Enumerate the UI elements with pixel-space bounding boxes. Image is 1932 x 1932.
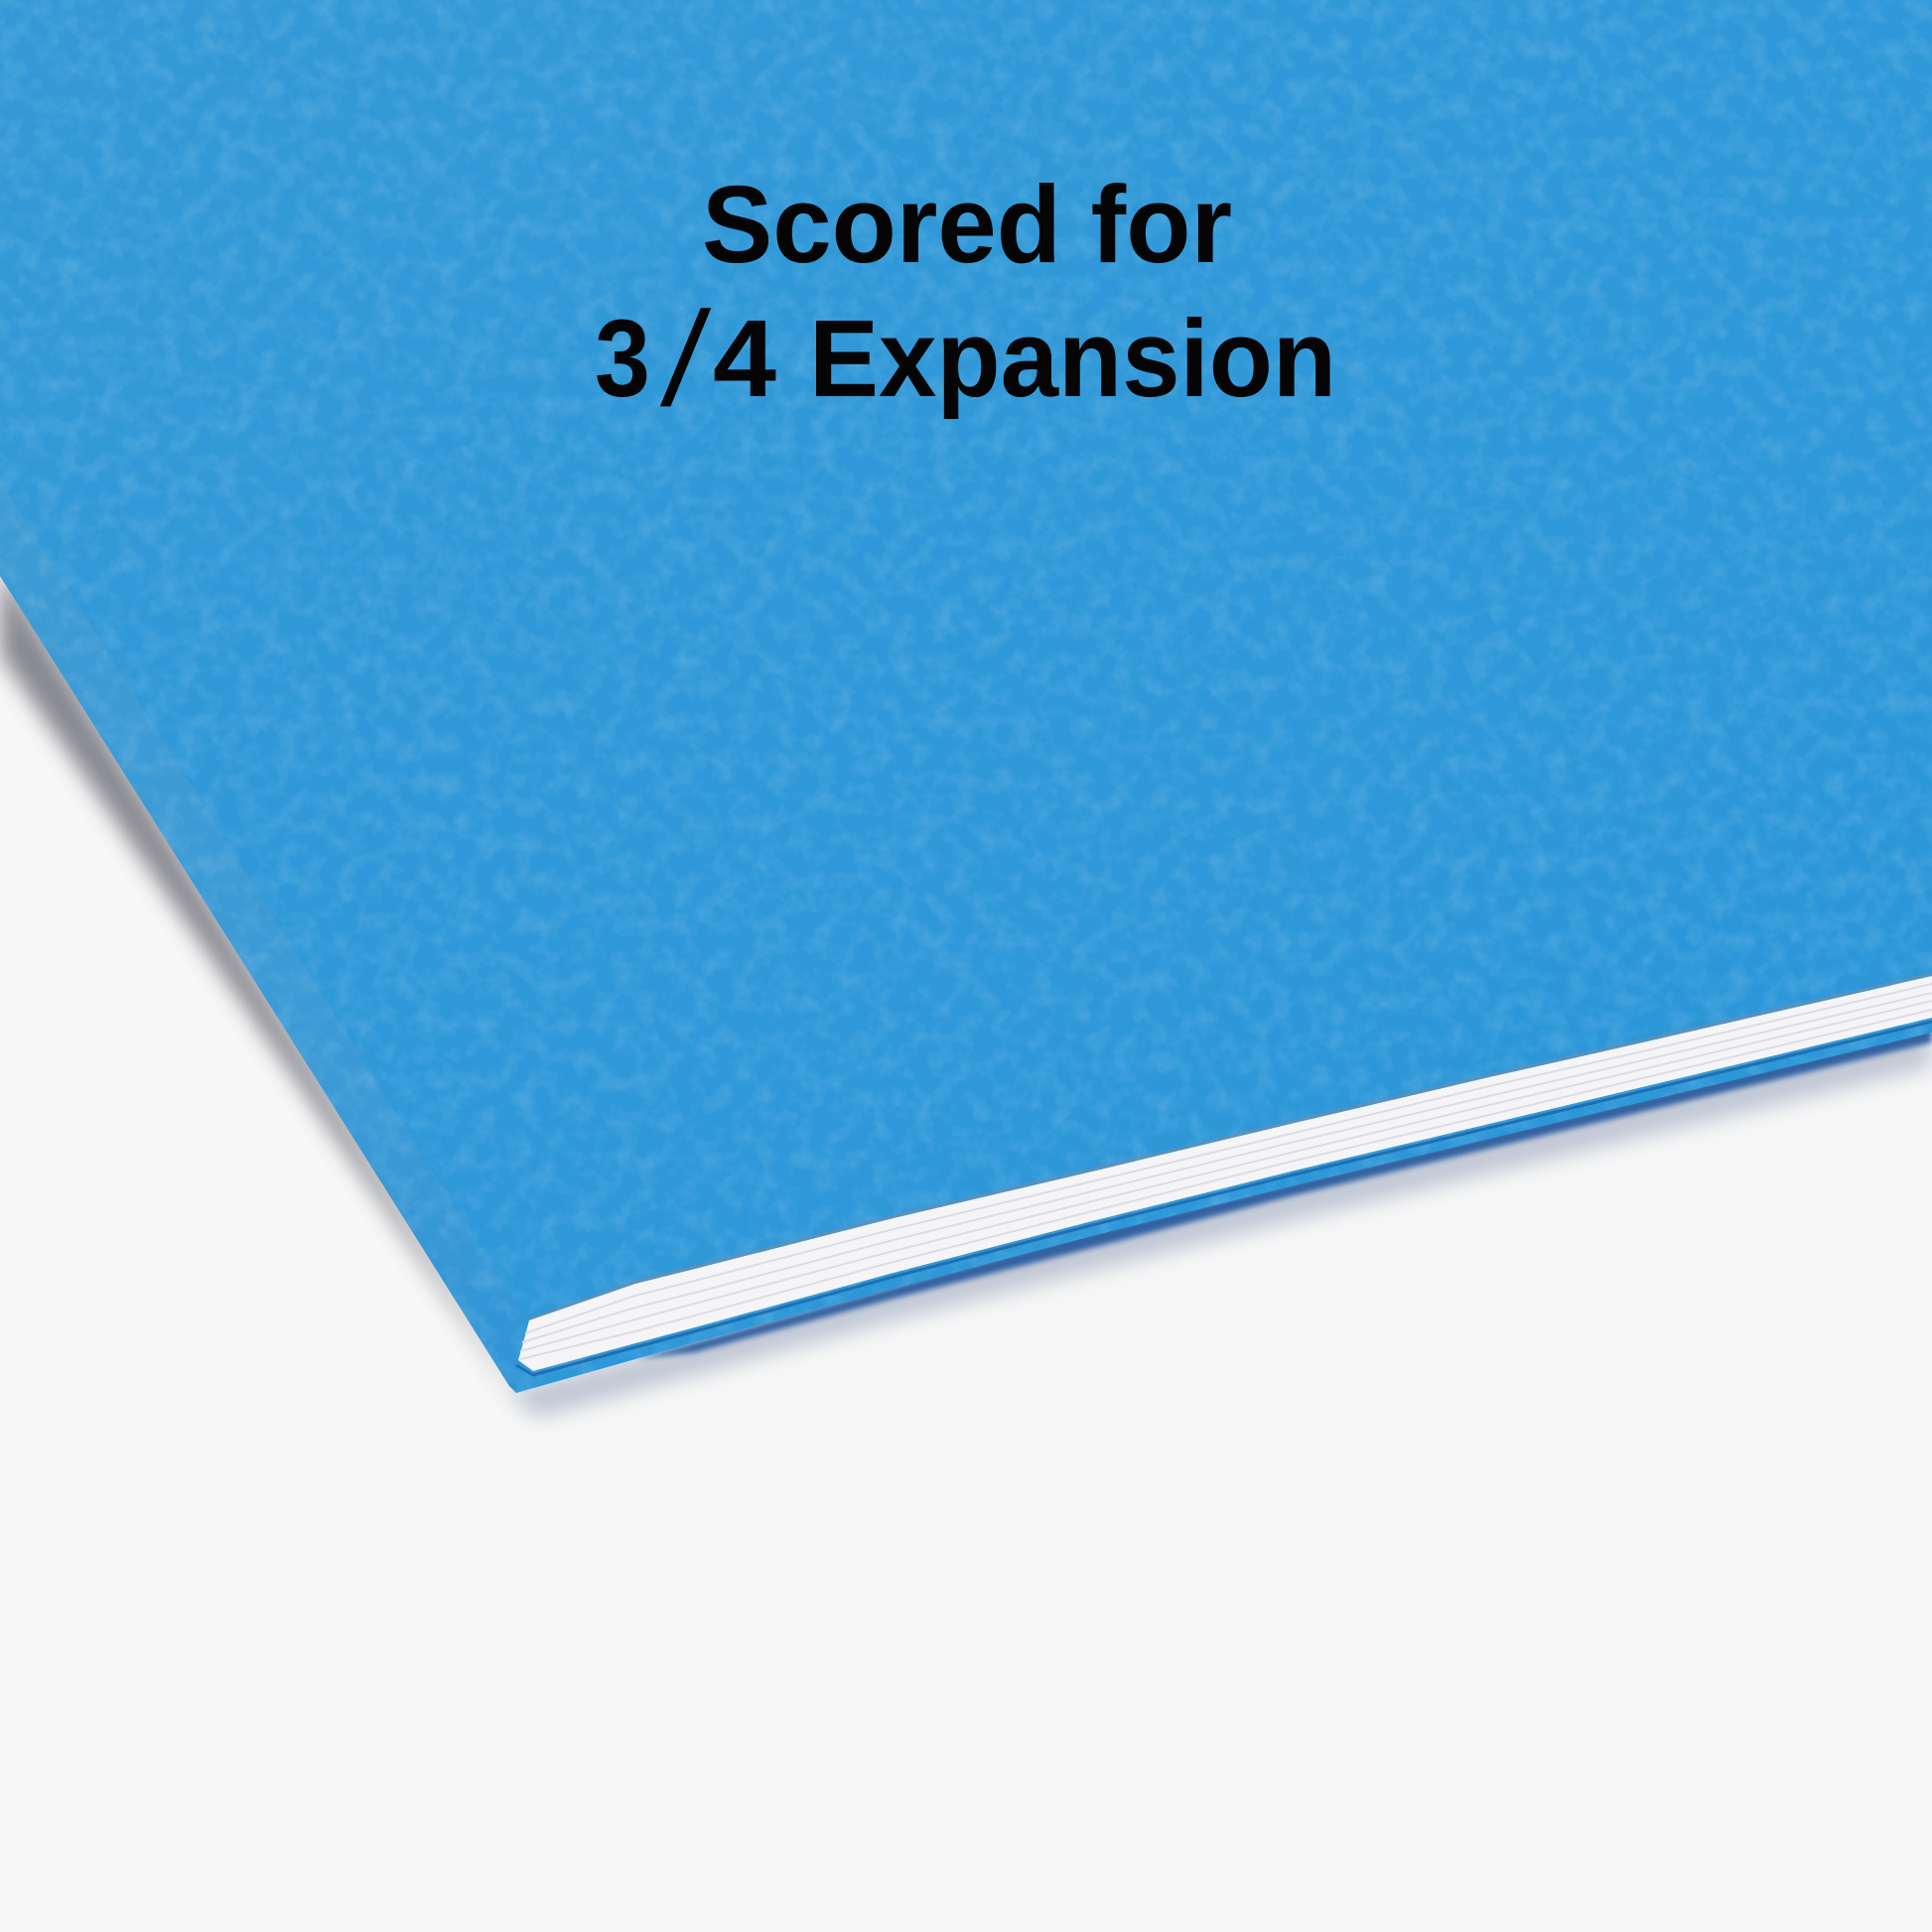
headline line 2: / bbox=[656, 284, 715, 434]
paper texture bbox=[0, 0, 1932, 1489]
product photo scene bbox=[0, 0, 1932, 1426]
headline line 1: Scored for bbox=[702, 164, 1232, 286]
headline line 2: 4 bbox=[713, 298, 776, 420]
headline line 2 bbox=[595, 284, 1336, 434]
sheet edges bbox=[520, 984, 1932, 1359]
folder cover bbox=[0, 0, 1932, 1489]
paper inserts bbox=[516, 974, 1932, 1375]
folder spine band bbox=[0, 481, 526, 1393]
headline bbox=[595, 164, 1336, 434]
headline line 2: 3 bbox=[595, 298, 650, 420]
headline line 2: Expansion bbox=[809, 298, 1336, 420]
folder shadow bbox=[0, 566, 1932, 1418]
